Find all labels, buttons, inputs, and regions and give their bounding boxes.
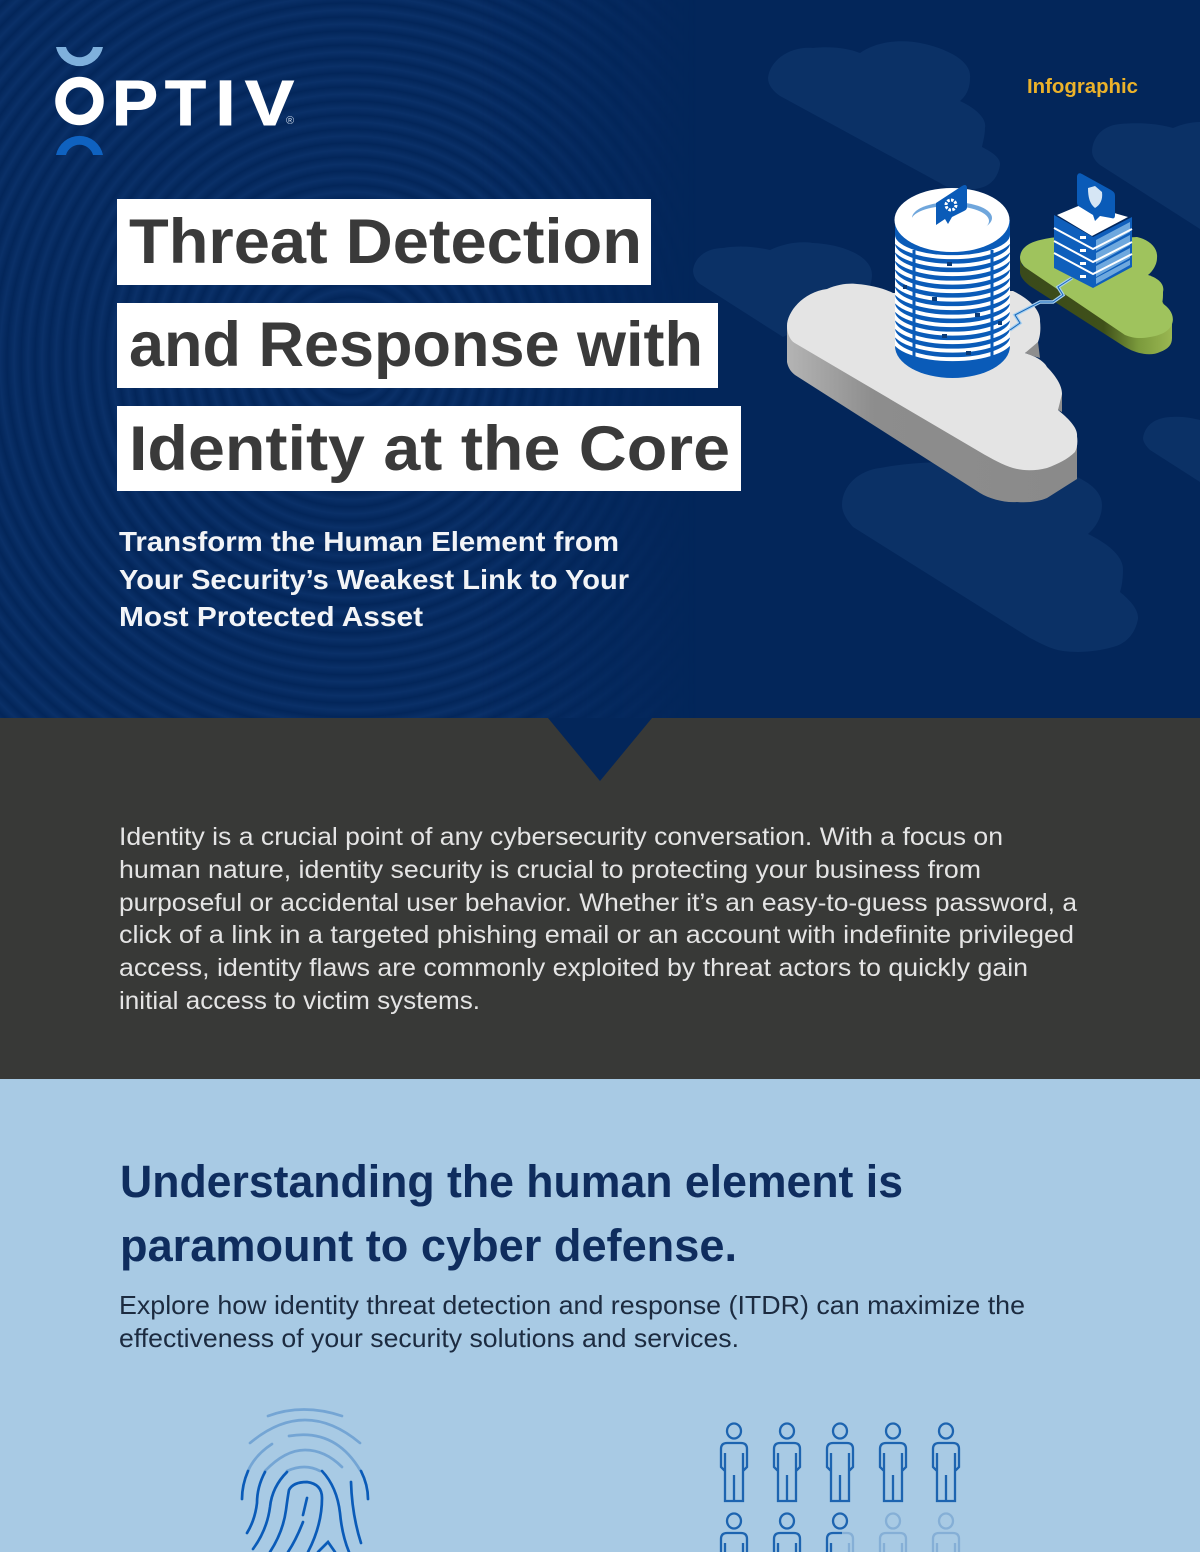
logo: Optiv: I [216, 67, 236, 139]
intro paragraph: access, identity flaws are commonly exploited by threat actors to quickly gain [119, 954, 1028, 982]
icon: gear tag [936, 185, 967, 225]
subtitle: Transform the Human Element from [119, 526, 619, 557]
section heading: Understanding the human element is [120, 1156, 903, 1207]
connector line [1010, 278, 1072, 330]
person row 2 [721, 1514, 959, 1552]
pointer triangle [548, 718, 652, 781]
illustration: clouds with server and database [787, 173, 1173, 502]
title: and Response with [129, 310, 703, 380]
green cloud [1020, 237, 1173, 354]
intro paragraph [119, 823, 1077, 1015]
intro paragraph: click of a link in a targeted phishing email or an account with indefinite privileged [119, 921, 1074, 949]
section intro text [119, 1290, 1025, 1353]
icon: shield tag [1077, 173, 1115, 221]
section intro text: Explore how identity threat detection and response (ITDR) can maximize the [119, 1290, 1025, 1320]
database cylinder [893, 188, 1012, 378]
panel: navy hero background [0, 0, 1200, 718]
title: Threat Detection [129, 207, 642, 277]
background clouds [693, 41, 1200, 652]
intro paragraph: Identity is a crucial point of any cybersecurity conversation. With a focus on [119, 823, 1003, 851]
subtitle: Your Security’s Weakest Link to Your [119, 564, 629, 595]
people chart: 8 of 10 highlighted [721, 1424, 959, 1552]
section intro text: effectiveness of your security solutions and services. [119, 1323, 739, 1353]
white cloud [787, 284, 1077, 502]
intro paragraph: human nature, identity security is crucial to protecting your business from [119, 856, 981, 884]
title: Identity at the Core [129, 414, 730, 484]
label: Infographic: Infographic [1027, 76, 1138, 98]
logo: Optiv: T [165, 67, 206, 139]
subtitle [119, 526, 629, 632]
panel: light blue section [0, 1079, 1200, 1552]
intro paragraph: initial access to victim systems. [119, 987, 480, 1015]
icon: fingerprint [242, 1410, 368, 1552]
panel: dark intro band [0, 718, 1200, 1079]
logo: Optiv: V [245, 67, 294, 139]
subtitle: Most Protected Asset [119, 601, 423, 632]
intro paragraph: purposeful or accidental user behavior. Whether it’s an easy-to-guess password, a [119, 889, 1077, 917]
logo: Optiv: P [112, 67, 158, 139]
person row 1 [721, 1424, 959, 1501]
section heading [120, 1156, 903, 1271]
logo: Optiv [56, 47, 294, 155]
server stack [1054, 204, 1132, 288]
section heading: paramount to cyber defense. [120, 1220, 737, 1271]
title [117, 199, 741, 491]
logo: Optiv: ® [286, 115, 294, 127]
